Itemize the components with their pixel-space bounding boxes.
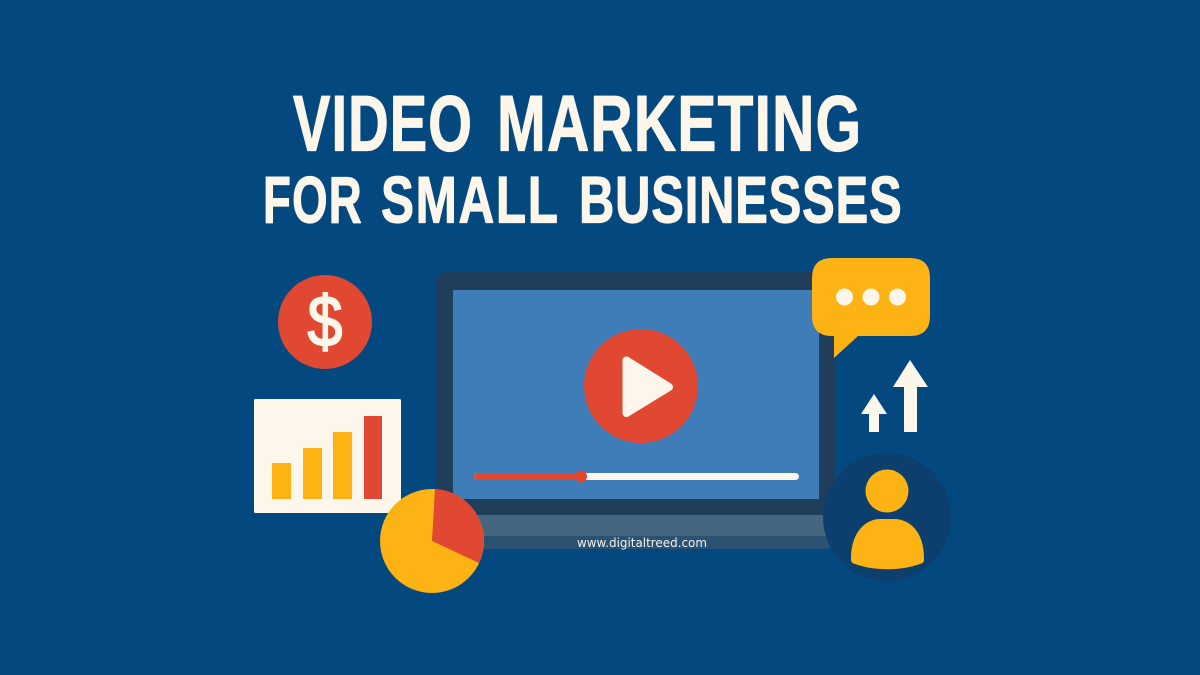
laptop	[435, 272, 835, 550]
title: VIDEO	[293, 79, 472, 168]
icon: user avatar	[823, 453, 951, 581]
bar chart	[254, 399, 401, 513]
title: SMALL	[381, 164, 558, 237]
title: FOR	[263, 164, 362, 238]
video screen	[453, 290, 819, 499]
website url: www.digitaltreed.com	[577, 535, 707, 550]
play button	[584, 329, 698, 443]
icon: speech bubble	[812, 258, 930, 358]
title	[263, 79, 902, 238]
laptop frame	[435, 272, 835, 515]
laptop base	[455, 515, 833, 549]
pie chart	[380, 489, 484, 593]
title: MARKETING	[497, 79, 861, 168]
video progress bar	[474, 470, 799, 482]
icon: dollar coin: $	[308, 282, 342, 362]
icon: growth arrows	[861, 360, 928, 432]
title: BUSINESSES	[579, 163, 902, 237]
icon: dollar coin	[278, 275, 372, 369]
